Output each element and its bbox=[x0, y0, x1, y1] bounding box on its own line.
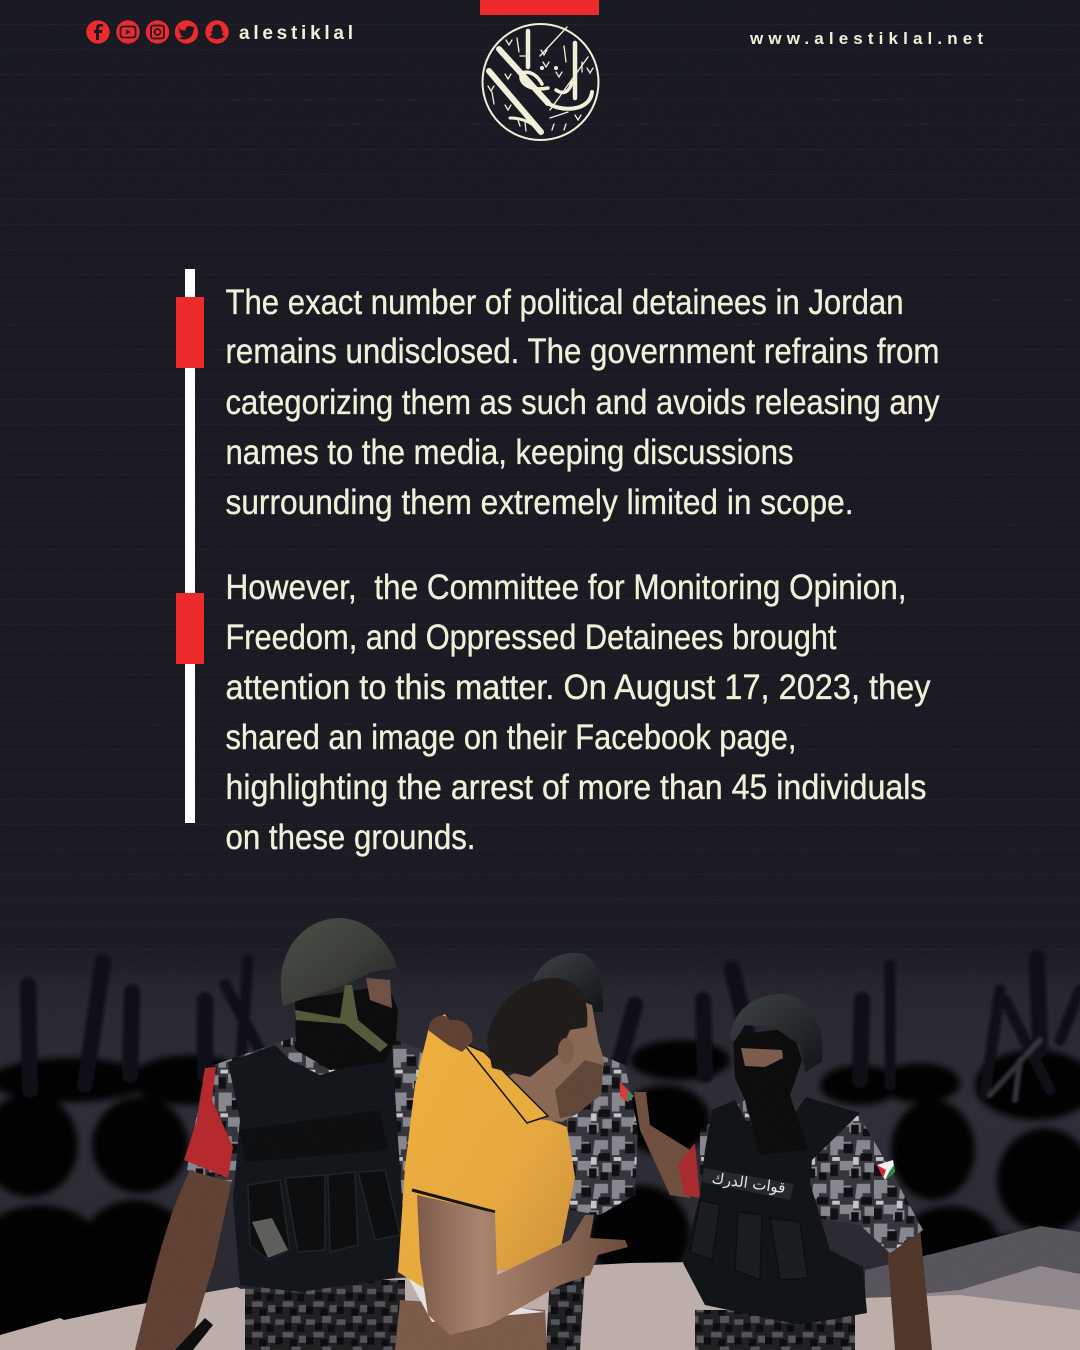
rear soldier helmet bbox=[531, 953, 603, 1012]
crowd silhouette backdrop bbox=[0, 950, 1080, 1350]
right soldier camouflage sleeve bbox=[740, 1105, 923, 1253]
photo: right soldier bbox=[634, 994, 932, 1350]
man's neck and face bbox=[505, 1000, 604, 1122]
right soldier eye band bbox=[741, 1048, 783, 1067]
right soldier red armband bbox=[678, 1143, 700, 1198]
icon: twitter bbox=[175, 20, 198, 44]
man's raised arm bbox=[417, 1195, 628, 1335]
right soldier balaclava bbox=[733, 1028, 808, 1155]
right soldier left arm bbox=[634, 1092, 690, 1198]
paragraph one: names to the media, keeping discussions bbox=[226, 433, 794, 472]
sleeve hem bbox=[412, 1190, 495, 1212]
right soldier vest bbox=[683, 1097, 867, 1325]
vest name tape: قوات الدرك bbox=[711, 1169, 787, 1197]
red marker two bbox=[176, 593, 204, 664]
paragraph one: surrounding them extremely limited in scope. bbox=[226, 483, 854, 522]
paragraph one: The exact number of political detainees in Jordan bbox=[226, 283, 904, 322]
left soldier camouflage shirt bbox=[187, 1035, 425, 1260]
paragraph two: on these grounds. bbox=[226, 818, 476, 857]
brand bar: social icons and handle bbox=[86, 20, 353, 44]
left soldier trousers bbox=[245, 1280, 405, 1350]
right soldier trousers bbox=[695, 1310, 855, 1350]
left soldier balaclava bbox=[295, 985, 398, 1070]
right soldier helmet bbox=[730, 994, 823, 1072]
vertical timeline bar with red markers bbox=[176, 269, 204, 823]
photo: detained man in yellow shirt bbox=[395, 978, 628, 1350]
paragraph two: However, the Committee for Monitoring Opinion, bbox=[226, 568, 906, 607]
left soldier chin strap bbox=[295, 985, 388, 1052]
rear soldier camouflage sleeve bbox=[567, 1055, 638, 1215]
paragraph two: shared an image on their Facebook page, bbox=[226, 718, 796, 757]
top red tab bbox=[480, 0, 599, 15]
paragraph two bbox=[226, 568, 931, 857]
icon: youtube bbox=[116, 20, 140, 44]
soldier's hand on collar bbox=[428, 1016, 473, 1052]
paragraph two: attention to this matter. On August 17, 2023, they bbox=[226, 668, 931, 707]
paragraph one: remains undisclosed. The government refrains from bbox=[226, 332, 940, 371]
baton bbox=[175, 1318, 213, 1350]
left soldier face bbox=[366, 978, 392, 1008]
icon: snapchat bbox=[205, 20, 229, 44]
vest pouches bbox=[248, 1170, 400, 1260]
yellow shirt bbox=[398, 1014, 575, 1298]
left soldier tactical vest bbox=[228, 1045, 405, 1292]
sand ground bbox=[0, 1226, 1080, 1350]
photo: left soldier bbox=[135, 918, 425, 1350]
paragraph one: categorizing them as such and avoids releasing any bbox=[226, 383, 940, 422]
rear soldier trousers bbox=[546, 1270, 585, 1350]
man's beard bbox=[555, 1060, 603, 1118]
photo: rear soldier bbox=[531, 953, 638, 1350]
shirt collar bbox=[463, 1043, 548, 1123]
icon: facebook bbox=[86, 20, 110, 44]
left soldier helmet bbox=[281, 918, 397, 1006]
left soldier red armband bbox=[184, 1067, 233, 1178]
vest pouches bbox=[690, 1200, 808, 1280]
man's hair bbox=[487, 978, 587, 1077]
paragraph one bbox=[226, 283, 940, 522]
website address: www.alestiklal.net bbox=[749, 29, 983, 48]
left soldier arm bbox=[135, 1170, 232, 1350]
red marker one bbox=[176, 297, 204, 368]
icon: instagram bbox=[146, 20, 169, 44]
man's belly bbox=[395, 1300, 547, 1350]
rear soldier flag patch bbox=[620, 1082, 634, 1102]
right soldier shoulder flag bbox=[877, 1160, 895, 1180]
handle text: alestiklal bbox=[239, 23, 353, 44]
paragraph two: highlighting the arrest of more than 45 individuals bbox=[226, 768, 926, 807]
right soldier right arm bbox=[887, 1228, 932, 1350]
paragraph two: Freedom, and Oppressed Detainees brought bbox=[226, 618, 837, 657]
man's ear bbox=[558, 1038, 574, 1064]
logo: calligraphic roundel bbox=[482, 24, 598, 140]
